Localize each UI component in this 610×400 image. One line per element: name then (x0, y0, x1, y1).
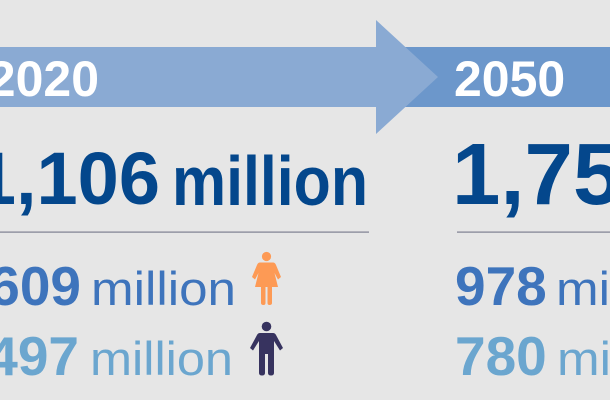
band: 2050 timeline (400, 47, 610, 107)
men 2020: 497 million (0, 325, 233, 387)
icon: woman (252, 252, 281, 305)
divider 2050 (457, 232, 610, 233)
men 2020: 497 million: million (90, 332, 233, 385)
icon: man (250, 322, 283, 376)
men 2050: 780 million (455, 325, 610, 387)
women 2050: 978 million (455, 255, 610, 317)
women 2020: 609 million: million (91, 262, 236, 315)
women 2020: 609 million (0, 255, 236, 317)
divider 2020 (0, 232, 369, 233)
total 2020: 1,106 million: million (172, 142, 368, 220)
arrow: 2020 to 2050 (0, 20, 438, 134)
year: 2050: 2050 (454, 51, 565, 107)
total 2020: 1,106 million (0, 137, 368, 220)
men 2050: 780 million: 780 (455, 325, 547, 387)
women 2050: 978 million: 978 (455, 255, 547, 317)
